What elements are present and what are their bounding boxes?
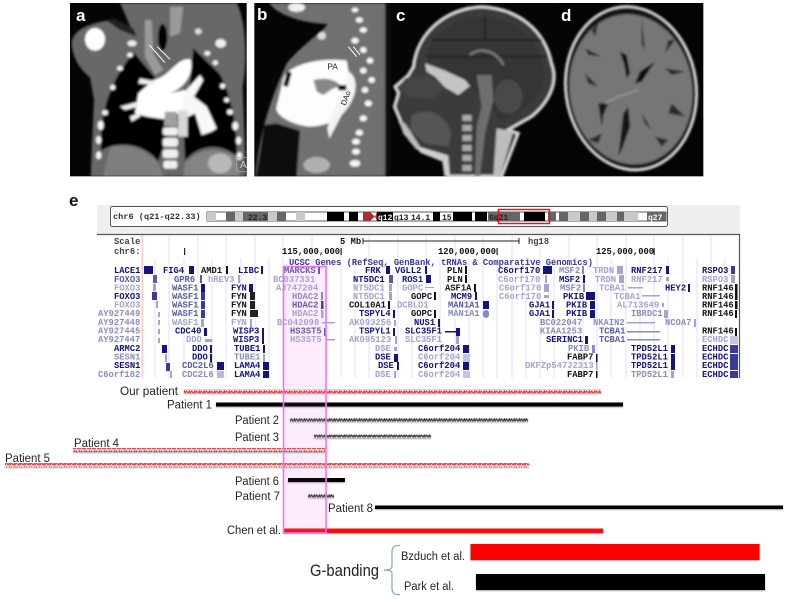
- gene row 2: NT5DC1: [353, 275, 385, 285]
- gene row 10: TUBE1: [234, 344, 260, 354]
- gene row 8: RNF146: [702, 326, 734, 336]
- gene row 3: FYN: [231, 284, 247, 294]
- chromosome ideogram: 22.3: [248, 214, 267, 223]
- centromere: [363, 212, 377, 221]
- deletion bar: Patient 7: [235, 491, 334, 503]
- gene row 1: LIBC: [238, 266, 260, 276]
- gene row 9: SLC35F1: [405, 335, 442, 345]
- gene row 10: PKIB: [568, 344, 590, 354]
- gene row 9: ECHDC: [702, 335, 729, 345]
- gene row 2: hREV3: [208, 275, 234, 285]
- gene row 11: TPD52L1: [631, 352, 668, 362]
- gene row 8: HS3ST5: [290, 326, 322, 336]
- gene row 3: TCBA1: [599, 284, 625, 294]
- gene row 4: PKIB: [563, 292, 585, 302]
- gene row 4: WASF1: [172, 292, 198, 302]
- gene row 11: TUBE1: [234, 352, 260, 362]
- gene track panel: [97, 234, 740, 378]
- gene row 13: C6orf182: [98, 370, 140, 380]
- gene row 4: HDAC2: [292, 292, 318, 302]
- gene row 5: MAN1A1: [448, 300, 480, 310]
- gene row 9: DDO: [186, 335, 202, 345]
- deletion bar: Patient 2: [235, 415, 528, 427]
- gene row 1: RNF217: [631, 266, 663, 276]
- gene row 2: TRDN: [595, 275, 616, 285]
- gene row 3: FOXO3: [114, 284, 140, 294]
- label: PA: PA: [327, 61, 338, 71]
- label: A orientation marker: [236, 157, 246, 172]
- panel letter b: b: [257, 5, 267, 24]
- gene row 1: PLN: [447, 266, 463, 276]
- gene row 8: KIAA1253: [540, 326, 582, 336]
- gene row 4: FYN: [231, 292, 247, 302]
- bar: Bzduch et al.: [401, 544, 760, 563]
- gene row 11: DDO: [192, 352, 208, 362]
- arrow: white arrow in panel a: [149, 45, 170, 63]
- panel letter c: c: [396, 6, 405, 25]
- gene row 7: NCOA7: [665, 318, 691, 328]
- gene row 9: HS3ST5: [290, 335, 322, 345]
- gene row 6: FYN: [231, 309, 247, 319]
- deletion bar: Patient 3: Patient 3: [235, 432, 279, 444]
- chromosome ideogram: 6q21: [489, 214, 508, 223]
- deletion bar: Patient 3: [235, 432, 431, 444]
- gene row 4: FOXO3: [114, 292, 140, 302]
- deletion bar: Patient 6: [235, 476, 345, 488]
- gene row 1: MARCKS: [284, 266, 316, 276]
- gene row 3: WASF1: [172, 284, 198, 294]
- gene row 1: C6orf170: [498, 266, 540, 276]
- gene row 8: TCBA1: [599, 326, 625, 336]
- panel a: coronal CT of the chest: [70, 3, 249, 176]
- gene row 8: AY927445: [98, 326, 140, 336]
- gene row 6: HDAC2: [292, 309, 318, 319]
- gene row 6: IBRDC1: [631, 309, 663, 319]
- gene row 6: [98, 309, 737, 319]
- gene row 13: [98, 370, 738, 380]
- gene row 7: AY927448: [98, 318, 140, 328]
- gene row 12: LAMA4: [234, 361, 261, 371]
- panel c: sagittal brain MRI: [390, 3, 560, 176]
- chromosome ideogram: [207, 212, 666, 223]
- chromosome ideogram: q12: [378, 214, 393, 223]
- gene row 9: TCBA1: [599, 335, 625, 345]
- gene row 8: CDC40: [175, 326, 201, 336]
- gene row 5: FYN: [231, 300, 247, 310]
- scale and position rows: Scale: [114, 237, 140, 247]
- highlight: pink candidate region fill: [283, 266, 326, 533]
- scale and position rows: [114, 237, 655, 268]
- gene row 12: TPD52L1: [631, 361, 668, 371]
- gene row 4: [114, 292, 738, 302]
- gene row 3: RNF146: [702, 284, 734, 294]
- gene row 3: GOPC: [402, 284, 424, 294]
- gene row 10: DDO: [192, 344, 208, 354]
- deletion bar: Patient 6: Patient 6: [235, 476, 279, 488]
- gene row 12: [114, 361, 738, 371]
- gene row 9: [98, 335, 738, 345]
- deletion bar: Patient 1: Patient 1: [167, 400, 212, 412]
- gene row 13: TPD52L1: [631, 370, 668, 380]
- gene row 3: C6orf170: [499, 284, 541, 294]
- gene row 7: BC042098: [277, 318, 319, 328]
- gene row 5: GJA1: [529, 300, 550, 310]
- gene row 4: NT5DC1: [353, 292, 385, 302]
- gene row 6: RNF146: [702, 309, 734, 319]
- gene row 11: SESN1: [114, 352, 140, 362]
- gene row 10: TPD52L1: [631, 344, 668, 354]
- chromosome ideogram: q27: [648, 214, 663, 223]
- gene row 12: SESN1: [114, 361, 140, 371]
- gene row 1: TRDN: [593, 266, 614, 276]
- gene row 3: ASF1A: [445, 284, 472, 294]
- gene row 12: ECHDC: [702, 361, 729, 371]
- gene row 5: AL713649: [617, 300, 659, 310]
- gene row 13: FABP7: [567, 370, 593, 380]
- gene row 1: LACE1: [114, 266, 140, 276]
- gene row 7: NUS1: [414, 318, 435, 328]
- gene row 2: C6orf170: [498, 275, 540, 285]
- gene row 7: FYN: [231, 318, 247, 328]
- chromosome ideogram: 14.1: [411, 214, 430, 223]
- gene row 6: MAN1A1: [448, 309, 480, 319]
- gene row 3: NT5DC1: [353, 284, 385, 294]
- gene row 7: AK093256: [349, 318, 391, 328]
- gene row 5: COL10A1: [349, 300, 386, 310]
- gene row 10: ARMC2: [114, 344, 140, 354]
- gene row 3: MSF2: [560, 284, 581, 294]
- gene row 9: AY927447: [98, 335, 140, 345]
- bar: Park et al.: Park et al.: [404, 581, 454, 593]
- gene row 1: RSPO3: [702, 266, 728, 276]
- deletion bar: Our patient: Our patient: [120, 386, 179, 398]
- gene row 6: AY927449: [98, 309, 140, 319]
- gene row 5: [114, 300, 738, 310]
- gene row 8: TSPYL1: [359, 326, 391, 336]
- chromosome label: chr6 (q21-q22.33): [113, 212, 201, 222]
- deletion bar: Patient 8: Patient 8: [328, 503, 373, 515]
- gene row 10: DSE: [375, 344, 391, 354]
- gene row 5: RNF146: [702, 300, 734, 310]
- highlight: pink candidate region outline: [284, 266, 326, 533]
- gene row 1: MSF2: [559, 266, 580, 276]
- gene row 7: [98, 318, 696, 328]
- gene row 2: BC037331: [273, 275, 315, 285]
- gene row 5: DCBLD1: [397, 300, 429, 310]
- panel letter e: e: [69, 191, 78, 210]
- gene row 1: FRK: [365, 266, 382, 276]
- gene row 4: RNF146: [702, 292, 734, 302]
- gene row 1: AMD1: [201, 266, 222, 276]
- gene row 2: [114, 275, 735, 285]
- gene row 10: C6orf204: [418, 344, 461, 354]
- gene row 5: HDAC2: [292, 300, 318, 310]
- gene row 1: VGLL2: [395, 266, 421, 276]
- gene row 1: [114, 266, 735, 276]
- bar: Park et al.: [404, 574, 765, 593]
- gene row 10: [114, 344, 738, 354]
- chromosome ideogram: 15: [442, 214, 452, 223]
- gene row 6: PKIB: [566, 309, 588, 319]
- gene row 7: NKAIN2: [593, 318, 625, 328]
- scale and position rows: hg18: [528, 237, 549, 247]
- deletion bar: Our patient: [120, 386, 601, 398]
- bar: Bzduch et al.: Bzduch et al.: [401, 551, 465, 563]
- deletion bar: Patient 7: Patient 7: [235, 491, 280, 503]
- gene row 6: WASF1: [172, 309, 198, 319]
- gene row 12: C6orf204: [418, 361, 461, 371]
- scale and position rows: UCSC Genes (RefSeq, GenBank, tRNAs & Comparative Genomics): [289, 258, 593, 268]
- gene row 5: FOXO3: [114, 300, 140, 310]
- gene row 9: SERINC1: [546, 335, 583, 345]
- gene row 11: DSE: [375, 352, 391, 362]
- deletion bar: Patient 1: [167, 400, 623, 412]
- panel letter a: a: [76, 6, 86, 25]
- gene row 4: MCM9: [451, 292, 472, 302]
- gene row 2: FOXO3: [114, 275, 140, 285]
- gene row 12: CDC2L6: [182, 361, 214, 371]
- gene row 11: FABP7: [567, 352, 593, 362]
- deletion bar: Chen et al.: Chen et al.: [227, 525, 281, 537]
- gene row 6: TSPYL4: [359, 309, 391, 319]
- gene row 11: [114, 352, 738, 362]
- deletion bar: Chen et al.: [227, 525, 603, 537]
- gene row 13: ECHDC: [702, 370, 729, 380]
- gene row 3: HEY2: [665, 284, 686, 294]
- deletion bar: Patient 2: Patient 2: [235, 415, 279, 427]
- panel label: c: [395, 8, 413, 21]
- gene row 3: [114, 284, 738, 294]
- gene row 6: GJA1: [529, 309, 550, 319]
- highlighted region on ideogram: [498, 210, 550, 224]
- gene row 4: TCBA1: [614, 292, 640, 302]
- gene row 2: RNF217: [631, 275, 663, 285]
- gene row 7: BC022047: [540, 318, 582, 328]
- gene row 10: ECHDC: [702, 344, 729, 354]
- deletion bar: Patient 5: [5, 453, 529, 467]
- deletion bar: Patient 4: Patient 4: [74, 438, 120, 450]
- deletion bar: Patient 4: [73, 438, 325, 452]
- gene row 9: AK095123: [349, 335, 391, 345]
- chromosome ideogram: q13: [394, 214, 409, 223]
- label: A orientation marker: A: [240, 160, 247, 171]
- gene row 13: DSE: [375, 370, 391, 380]
- gene row 4: GOPC: [411, 292, 433, 302]
- deletion bar: Patient 5: Patient 5: [5, 453, 50, 465]
- gene row 2: GPR6: [174, 275, 195, 285]
- gene row 8: [98, 326, 737, 336]
- scale and position rows: 120,000,000: [438, 247, 496, 257]
- G-banding label: G-banding: [310, 561, 379, 580]
- scale and position rows: chr6:: [114, 247, 140, 257]
- gene row 11: ECHDC: [702, 352, 729, 362]
- gene row 2: RSPO3: [702, 275, 728, 285]
- gene row 8: WISP3: [233, 326, 259, 336]
- gene row 4: C6orf170: [499, 292, 541, 302]
- gene row 2: ROS1: [402, 275, 423, 285]
- gene row 7: WASF1: [172, 318, 198, 328]
- gene row 1: FIG4: [163, 266, 185, 276]
- panel d: axial brain MRI: [560, 3, 704, 176]
- gene row 12: DKFZp547J2313: [525, 361, 594, 371]
- gene row 8: SLC35F1: [405, 326, 442, 336]
- brace: G-banding group: [384, 545, 400, 595]
- gene row 11: C6orf204: [418, 352, 461, 362]
- deletion bar: Patient 8: [328, 503, 783, 515]
- gene row 9: WISP3: [233, 335, 259, 345]
- arrow: white arrow in panel b: [348, 47, 360, 57]
- scale and position rows: 115,000,000: [282, 247, 340, 257]
- label: DAo: DAo: [339, 90, 353, 107]
- gene row 6: GOPC: [411, 309, 433, 319]
- gene row 2: PLN: [447, 275, 463, 285]
- gene row 5: WASF1: [172, 300, 198, 310]
- panel letter d: d: [561, 6, 571, 25]
- panel b: sagittal CT of the chest: [254, 3, 390, 176]
- gene row 5: PKIB: [566, 300, 588, 310]
- panel e: UCSC genome browser header: [97, 205, 740, 234]
- gene row 2: MSF2: [559, 275, 580, 285]
- scale and position rows: 125,000,000: [596, 247, 654, 257]
- scale and position rows: 5 Mb: [340, 237, 361, 247]
- gene row 13: CDC2L6: [182, 370, 214, 380]
- gene row 13: LAMA4: [234, 370, 261, 380]
- gene row 13: C6orf204: [418, 370, 461, 380]
- gene row 12: DSE: [378, 361, 394, 371]
- gene row 3: AJ747204: [276, 284, 319, 294]
